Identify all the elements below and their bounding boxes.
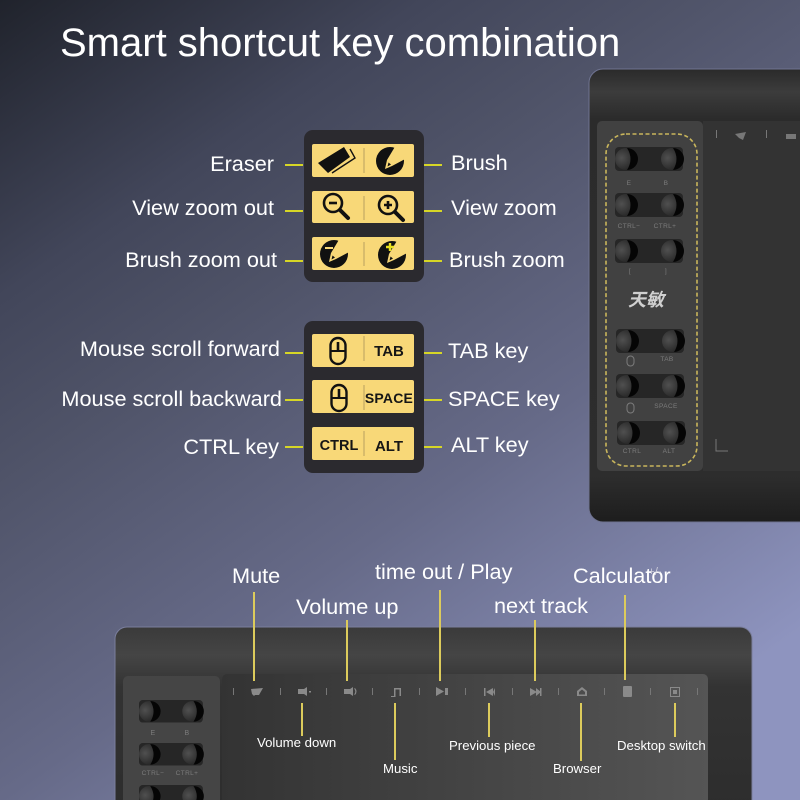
icon: volume up xyxy=(344,687,356,696)
lower media labels: Browser xyxy=(553,761,602,776)
left shortcut labels: CTRL key xyxy=(183,434,279,459)
lower media labels: Previous piece xyxy=(449,738,536,753)
media icons xyxy=(251,686,680,697)
corner mark xyxy=(716,439,728,451)
icon: play pause xyxy=(436,687,448,696)
upper media labels: Mute xyxy=(232,563,280,588)
rocker keys xyxy=(615,147,686,445)
icons: mouse captions xyxy=(627,356,634,413)
title: Smart shortcut key combination xyxy=(60,21,620,65)
left shortcut labels: Brush zoom out xyxy=(125,247,277,272)
callout lines: media keys xyxy=(254,590,675,761)
right shortcut labels: TAB key xyxy=(448,338,528,363)
key strip xyxy=(597,121,703,471)
key strip xyxy=(123,676,220,800)
key captions xyxy=(618,180,678,455)
key captions xyxy=(142,730,198,777)
left shortcut labels: View zoom out xyxy=(132,195,274,220)
top icon row xyxy=(716,130,796,140)
right shortcut labels: ALT key xyxy=(451,432,529,457)
lower media labels: Music xyxy=(383,761,418,776)
tablet: side view with shortcut keys xyxy=(589,69,800,522)
key captions: ] xyxy=(665,268,667,275)
key row: mouse forward and TAB: TAB xyxy=(374,343,404,360)
right shortcut labels: SPACE key xyxy=(448,386,560,411)
tick marks xyxy=(233,688,698,695)
key row: view zoom xyxy=(312,191,414,223)
lower media labels xyxy=(257,735,706,776)
left shortcut labels: Mouse scroll forward xyxy=(80,336,280,361)
right shortcut labels: View zoom xyxy=(451,195,557,220)
working surface xyxy=(703,121,800,471)
upper media labels: Volume up xyxy=(296,594,398,619)
connector lines: shortcut labels xyxy=(285,165,442,447)
key captions: E xyxy=(627,180,632,187)
left shortcut labels: Eraser xyxy=(210,151,274,176)
rocker keys xyxy=(139,700,204,800)
key captions: TAB xyxy=(660,356,674,363)
key row: mouse forward and TAB xyxy=(312,334,414,367)
key captions: CTRL− xyxy=(618,223,640,230)
panel: mouse and modifier keys xyxy=(304,321,424,473)
left shortcut labels: Mouse scroll backward xyxy=(61,386,282,411)
key captions: [ xyxy=(629,268,631,275)
icon: next track xyxy=(530,688,542,696)
key captions: SPACE xyxy=(654,403,678,410)
key captions: CTRL+ xyxy=(176,770,198,777)
icon: mute xyxy=(251,688,263,696)
key captions: B xyxy=(664,180,668,187)
key row: eraser and brush xyxy=(312,144,414,177)
key row: mouse backward and SPACE: SPACE xyxy=(365,390,413,406)
key captions: CTRL xyxy=(623,448,641,455)
icon: desktop switch xyxy=(670,687,680,697)
key row: CTRL and ALT xyxy=(312,427,414,460)
lower media labels: Volume down xyxy=(257,735,336,750)
icon: calculator xyxy=(623,686,632,697)
key captions: CTRL+ xyxy=(654,223,676,230)
icon: music xyxy=(391,688,401,697)
icon: browser home xyxy=(577,687,587,696)
icon: previous track xyxy=(484,688,495,696)
upper media labels xyxy=(232,559,671,619)
key captions: B xyxy=(184,730,190,737)
upper media labels: time out / Play xyxy=(375,559,513,584)
right shortcut labels xyxy=(448,150,565,457)
key captions: E xyxy=(150,730,156,737)
upper media labels: Calculator xyxy=(573,563,671,588)
left shortcut labels xyxy=(61,151,282,459)
key row: CTRL and ALT: ALT xyxy=(375,438,403,455)
right shortcut labels: Brush zoom xyxy=(449,247,565,272)
key captions: CTRL− xyxy=(142,770,164,777)
panel: drawing tools keys xyxy=(304,130,424,282)
tablet: top view with media keys xyxy=(115,627,752,800)
key row: CTRL and ALT: CTRL xyxy=(320,438,358,454)
upper media labels: +/- xyxy=(648,566,662,578)
key captions: ALT xyxy=(663,448,675,455)
key row: brush zoom xyxy=(312,237,414,270)
upper media labels: next track xyxy=(494,593,588,618)
key row: mouse backward and SPACE xyxy=(312,380,414,413)
touch surface xyxy=(222,674,708,800)
icon: volume down xyxy=(298,687,311,696)
lower media labels: Desktop switch xyxy=(617,738,706,753)
brand: 天敏 xyxy=(628,290,667,310)
dashed highlight around keys xyxy=(606,134,697,466)
right shortcut labels: Brush xyxy=(451,150,508,175)
